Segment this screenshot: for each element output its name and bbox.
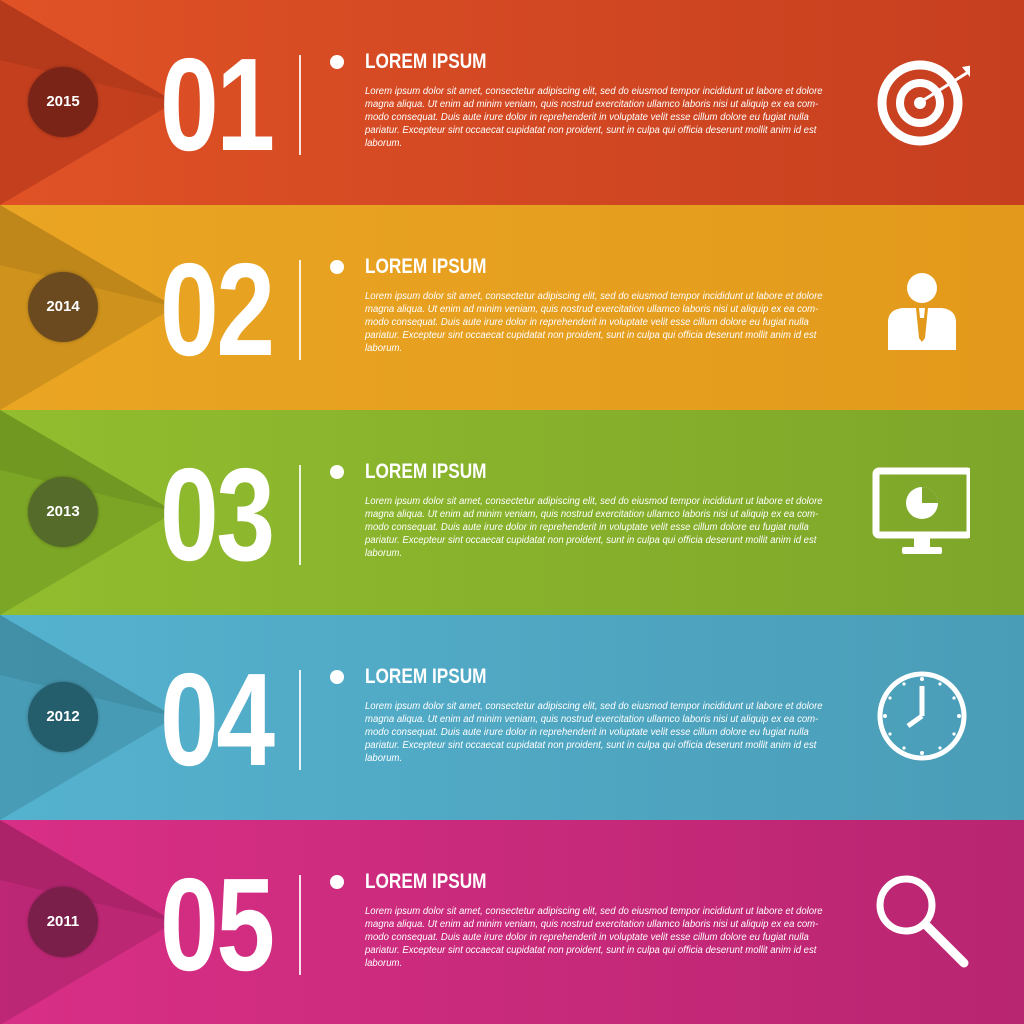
body text: laborum.	[365, 753, 402, 764]
body text: pariatur. Excepteur sint occaecat cupidatat non proident, sunt in culpa qui officia deserunt mollit anim id est	[365, 740, 816, 751]
panel: step 04	[0, 615, 1024, 820]
body text: magna aliqua. Ut enim ad minim veniam, quis nostrud exercitation ullamco laboris nisi ut aliquip ex ea com-	[365, 99, 818, 110]
bullet	[330, 465, 344, 479]
body text	[364, 291, 823, 354]
heading: LOREM IPSUM	[365, 870, 487, 893]
year badge 2013	[28, 477, 98, 547]
body text: laborum.	[365, 138, 402, 149]
body text: Lorem ipsum dolor sit amet, consectetur adipiscing elit, sed do eiusmod tempor incididunt ut labore et dolore	[365, 701, 823, 712]
body text: laborum.	[365, 548, 402, 559]
heading: LOREM IPSUM	[365, 255, 487, 278]
bullet	[330, 55, 344, 69]
body text: magna aliqua. Ut enim ad minim veniam, quis nostrud exercitation ullamco laboris nisi ut aliquip ex ea com-	[365, 714, 818, 725]
number 01: 01	[160, 31, 273, 178]
body text: modo consequat. Duis aute irure dolor in reprehenderit in voluptate velit esse cillum dolore eu fugiat nulla	[365, 112, 809, 123]
year badge 2014: 2014	[46, 298, 80, 315]
heading: LOREM IPSUM	[365, 460, 487, 483]
body text: laborum.	[365, 958, 402, 969]
icon: monitor	[872, 468, 970, 554]
body text: modo consequat. Duis aute irure dolor in reprehenderit in voluptate velit esse cillum dolore eu fugiat nulla	[365, 522, 809, 533]
number 02: 02	[160, 236, 273, 383]
body text: magna aliqua. Ut enim ad minim veniam, quis nostrud exercitation ullamco laboris nisi ut aliquip ex ea com-	[365, 919, 818, 930]
panel: step 02	[0, 205, 1024, 410]
body text: Lorem ipsum dolor sit amet, consectetur adipiscing elit, sed do eiusmod tempor incididunt ut labore et dolore	[365, 496, 823, 507]
body text: magna aliqua. Ut enim ad minim veniam, quis nostrud exercitation ullamco laboris nisi ut aliquip ex ea com-	[365, 509, 818, 520]
number 05: 05	[160, 851, 273, 998]
year badge 2015: 2015	[46, 93, 80, 110]
year badge 2015	[28, 67, 98, 137]
bullet	[330, 260, 344, 274]
body text: Lorem ipsum dolor sit amet, consectetur adipiscing elit, sed do eiusmod tempor incididunt ut labore et dolore	[365, 291, 823, 302]
icon: target	[878, 60, 970, 146]
body text: pariatur. Excepteur sint occaecat cupidatat non proident, sunt in culpa qui officia deserunt mollit anim id est	[365, 330, 816, 341]
bullet	[330, 875, 344, 889]
year badge 2013: 2013	[46, 503, 80, 520]
body text	[364, 701, 823, 764]
body text: pariatur. Excepteur sint occaecat cupidatat non proident, sunt in culpa qui officia deserunt mollit anim id est	[365, 125, 816, 136]
body text: modo consequat. Duis aute irure dolor in reprehenderit in voluptate velit esse cillum dolore eu fugiat nulla	[365, 727, 809, 738]
icon: person	[888, 273, 956, 350]
year badge 2014	[28, 272, 98, 342]
year badge 2011: 2011	[47, 913, 79, 930]
heading: LOREM IPSUM	[365, 50, 487, 73]
bullet	[330, 670, 344, 684]
panel: step 01	[0, 0, 1024, 205]
body text: Lorem ipsum dolor sit amet, consectetur adipiscing elit, sed do eiusmod tempor incididunt ut labore et dolore	[365, 86, 823, 97]
body text: pariatur. Excepteur sint occaecat cupidatat non proident, sunt in culpa qui officia deserunt mollit anim id est	[365, 535, 816, 546]
body text: laborum.	[365, 343, 402, 354]
year badge 2011	[28, 887, 98, 957]
body text: Lorem ipsum dolor sit amet, consectetur adipiscing elit, sed do eiusmod tempor incididunt ut labore et dolore	[365, 906, 823, 917]
year badge 2012	[28, 682, 98, 752]
panel: step 03	[0, 410, 1024, 615]
body text: modo consequat. Duis aute irure dolor in reprehenderit in voluptate velit esse cillum dolore eu fugiat nulla	[365, 317, 809, 328]
panel: step 05	[0, 820, 1024, 1024]
body text	[364, 906, 823, 969]
icon: magnifier	[876, 876, 968, 968]
body text: modo consequat. Duis aute irure dolor in reprehenderit in voluptate velit esse cillum dolore eu fugiat nulla	[365, 932, 809, 943]
body text: magna aliqua. Ut enim ad minim veniam, quis nostrud exercitation ullamco laboris nisi ut aliquip ex ea com-	[365, 304, 818, 315]
year badge 2012: 2012	[46, 708, 80, 725]
body text	[364, 496, 823, 559]
number 04: 04	[160, 646, 273, 793]
body text	[364, 86, 823, 149]
icon: clock	[878, 672, 966, 760]
number 03: 03	[160, 441, 273, 588]
heading: LOREM IPSUM	[365, 665, 487, 688]
body text: pariatur. Excepteur sint occaecat cupidatat non proident, sunt in culpa qui officia deserunt mollit anim id est	[365, 945, 816, 956]
